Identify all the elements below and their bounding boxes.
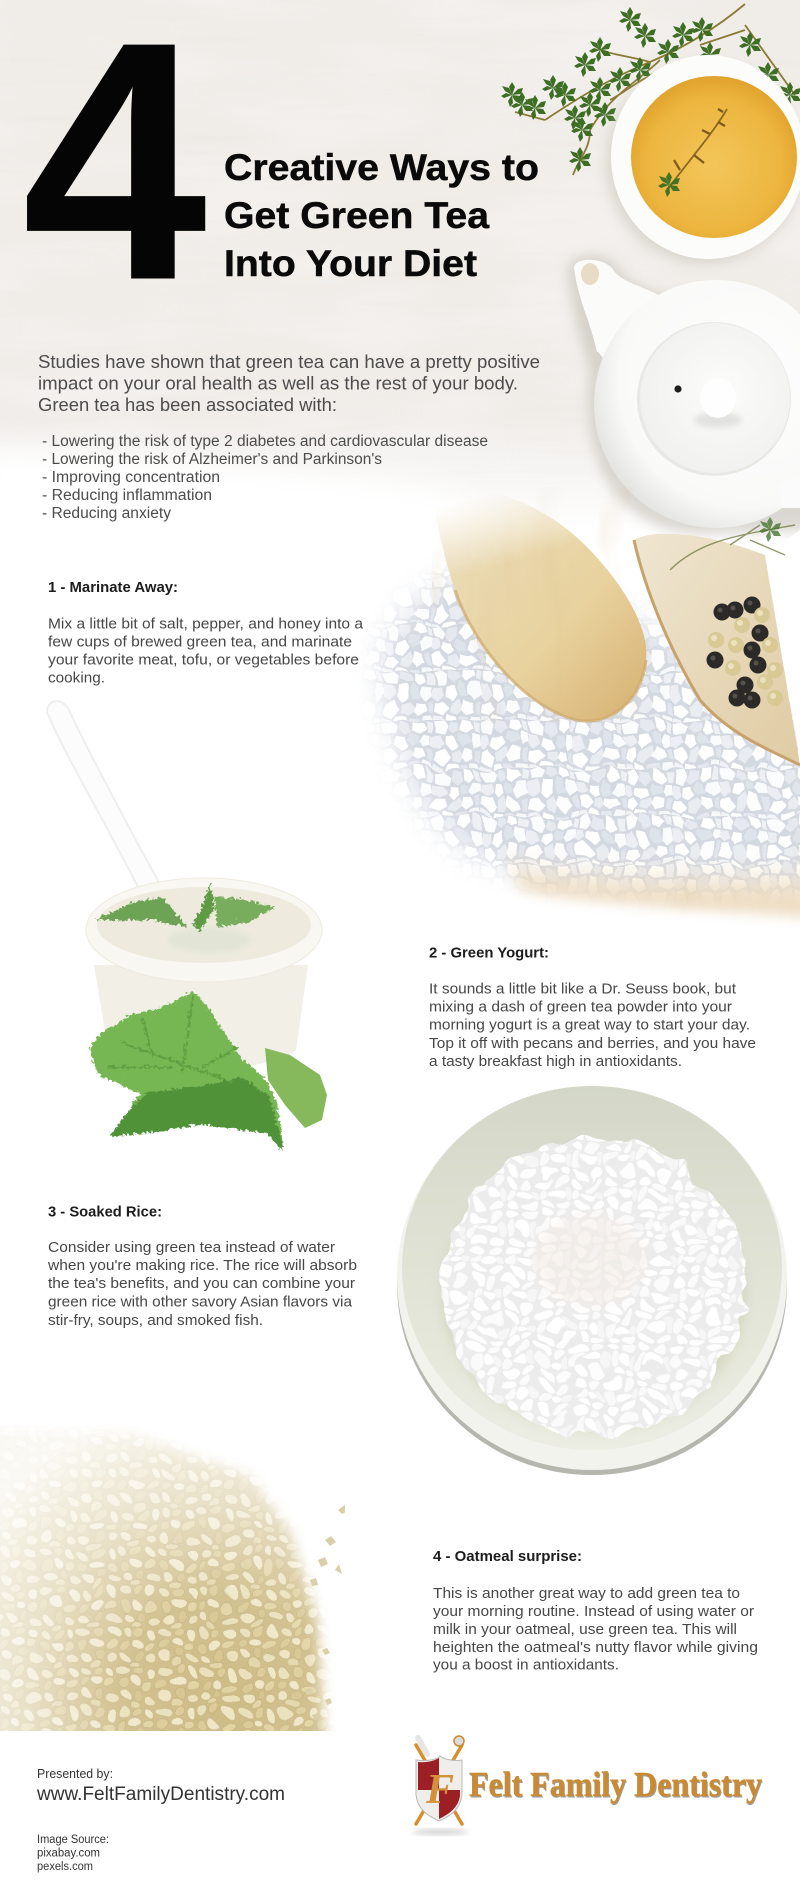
presented by credit	[36, 1767, 285, 1805]
title: Get Green Tea	[224, 195, 489, 236]
list of benefits: - Reducing anxiety	[42, 505, 171, 522]
tip 4 body: your morning routine. Instead of using water or	[433, 1603, 754, 1620]
illustration: yogurt cup with spoon and nettle leaves	[47, 701, 327, 1148]
tip 4: oatmeal surprise	[433, 1548, 758, 1674]
illustration: cup of green tea	[606, 55, 800, 264]
list of benefits	[42, 433, 488, 522]
tip 2 body	[429, 980, 756, 1070]
title: Creative Ways to	[224, 147, 539, 188]
illustration: bowl of white rice	[397, 1086, 787, 1475]
tip 3 body: the tea's benefits, and you can combine your	[48, 1275, 355, 1292]
logo: Felt Family Dentistry	[412, 1736, 763, 1835]
table wood under salt	[508, 856, 800, 923]
rice grains	[442, 1138, 746, 1434]
tip 3: soaked rice	[47, 1204, 357, 1329]
illustration: wooden spoons, salt and peppercorns	[369, 496, 800, 923]
peppercorns	[706, 596, 783, 708]
tip 2 body: It sounds a little bit like a Dr. Seuss book, but	[429, 980, 737, 998]
tip 2 body: morning yogurt is a great way to start your day.	[429, 1016, 750, 1034]
tip 2 body: mixing a dash of green tea powder into your	[429, 998, 732, 1016]
tip 1: marinate away	[48, 579, 364, 686]
logo wordmark: Felt Family Dentistry	[469, 1765, 762, 1804]
presented by credit: www.FeltFamilyDentistry.com	[36, 1784, 285, 1805]
tip 3 body: stir-fry, soups, and smoked fish.	[48, 1312, 263, 1329]
tip 3 body: Consider using green tea instead of water	[48, 1239, 335, 1256]
spoon handle	[47, 701, 162, 895]
tip 4 heading: 4 - Oatmeal surprise:	[433, 1548, 582, 1565]
tip 4 body: heighten the oatmeal's nutty flavor while giving	[433, 1639, 758, 1656]
teapot shadow	[568, 256, 800, 535]
tip 1 heading: 1 - Marinate Away:	[48, 579, 178, 596]
spout	[574, 260, 665, 375]
list of benefits: - Lowering the risk of type 2 diabetes and cardiovascular disease	[42, 433, 488, 450]
thyme in tea	[658, 109, 727, 197]
intro paragraph: Studies have shown that green tea can have a pretty positive	[38, 351, 540, 372]
tip 1 body: Mix a little bit of salt, pepper, and honey into a	[48, 616, 364, 632]
image sources: pixabay.com	[37, 1848, 100, 1860]
tip 2: green yogurt	[429, 944, 756, 1070]
right leaf	[265, 1048, 327, 1128]
tip 4 body: you a boost in antioxidants.	[433, 1656, 619, 1674]
tip 2 heading: 2 - Green Yogurt:	[429, 944, 549, 962]
shield: F	[425, 1767, 454, 1813]
tip 1 body: few cups of brewed green tea, and marinate	[48, 634, 352, 650]
illustration: rolled oats	[0, 1430, 345, 1731]
tip 1 body	[48, 616, 364, 686]
illustration: thyme sprig behind cup	[501, 4, 800, 175]
presented by credit: Presented by:	[37, 1767, 113, 1781]
list of benefits: - Lowering the risk of Alzheimer's and Parkinson's	[42, 451, 382, 468]
list of benefits: - Reducing inflammation	[42, 487, 212, 504]
shield	[416, 1756, 462, 1821]
tip 4 body: milk in your oatmeal, use green tea. This will	[433, 1621, 737, 1638]
logo shadow	[412, 1829, 468, 1835]
right wooden spoon	[634, 530, 800, 765]
image sources	[37, 1834, 109, 1873]
tip 4 body: This is another great way to add green tea to	[433, 1585, 740, 1602]
crossed toothbrush and mirror	[416, 1736, 464, 1824]
tip 1 body: cooking.	[48, 670, 105, 686]
coarse salt	[369, 565, 800, 896]
tip 3 heading: 3 - Soaked Rice:	[48, 1204, 162, 1220]
thyme sprig on spoon	[670, 525, 795, 570]
intro paragraph: impact on your oral health as well as the rest of your body.	[38, 372, 518, 394]
tip 2 body: Top it off with pecans and berries, and you have	[429, 1035, 756, 1052]
logo wordmark: Felt Family Dentistry	[470, 1766, 763, 1806]
illustration: white teapot	[568, 256, 800, 535]
list of benefits: - Improving concentration	[42, 469, 220, 486]
image sources: Image Source:	[37, 1834, 109, 1846]
tip 3 body	[47, 1239, 357, 1329]
tip 3 body: green rice with other savory Asian flavors via	[48, 1294, 353, 1310]
intro paragraph: Green tea has been associated with:	[38, 394, 337, 415]
tip 3 body: when you're making rice. The rice will absorb	[47, 1257, 357, 1274]
top nettle leaves	[92, 880, 272, 930]
cup body	[94, 965, 308, 1069]
title: Into Your Diet	[224, 243, 477, 284]
lid	[637, 322, 791, 476]
tip 1 body: your favorite meat, tofu, or vegetables before	[48, 652, 359, 668]
title	[224, 147, 539, 284]
big nettle leaf	[87, 989, 281, 1148]
intro paragraph	[38, 351, 540, 415]
left wooden spoon	[432, 487, 646, 721]
yogurt	[97, 887, 311, 963]
tip 2 body: a tasty breakfast high in antioxidants.	[429, 1053, 682, 1070]
cup rim	[86, 878, 322, 982]
image sources: pexels.com	[37, 1861, 93, 1873]
tip 4 body	[433, 1585, 758, 1674]
background: whitewashed wood table	[0, 0, 800, 489]
